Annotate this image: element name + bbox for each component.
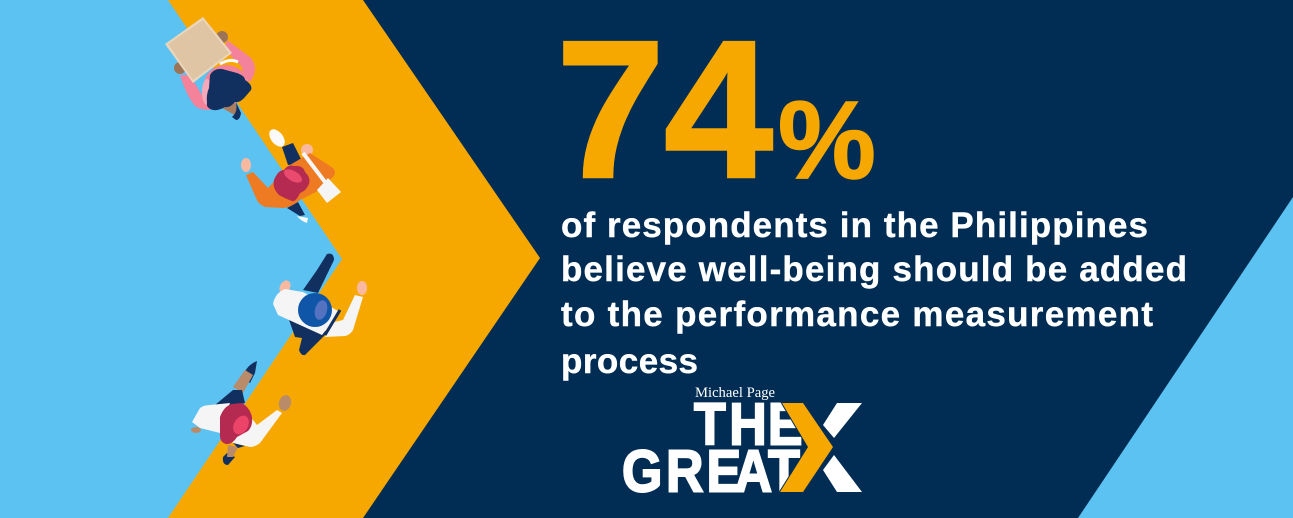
logo: amber X chevron <box>780 403 833 492</box>
logo: THE: THE <box>694 391 803 457</box>
logo: Michael Page wordmark: Michael Page <box>695 385 775 401</box>
statistic description: of respondents in the Philippines <box>561 206 1148 245</box>
big statistic 74%: 4 <box>664 0 773 219</box>
statistic description: believe well-being should be added <box>561 250 1187 289</box>
icon: person carrying a box <box>165 17 255 120</box>
logo: white X strokes <box>823 403 862 438</box>
icon: person with shoulder bag <box>241 126 341 223</box>
big statistic 74%: % <box>778 79 876 202</box>
icon: person with crimson hair <box>191 361 293 465</box>
icon: person with blue hair and white shirt <box>273 254 367 355</box>
amber chevron <box>168 0 540 518</box>
statistic description: process <box>561 342 698 381</box>
statistic description <box>561 206 1187 381</box>
panel: navy background shape <box>363 0 1293 518</box>
logo: Michael Page The Great X <box>622 385 862 504</box>
big statistic 74% <box>556 0 876 219</box>
statistic description: to the performance measurement <box>561 295 1153 334</box>
big statistic 74%: 7 <box>556 0 665 219</box>
logo: GREAT: GREAT <box>622 438 800 504</box>
